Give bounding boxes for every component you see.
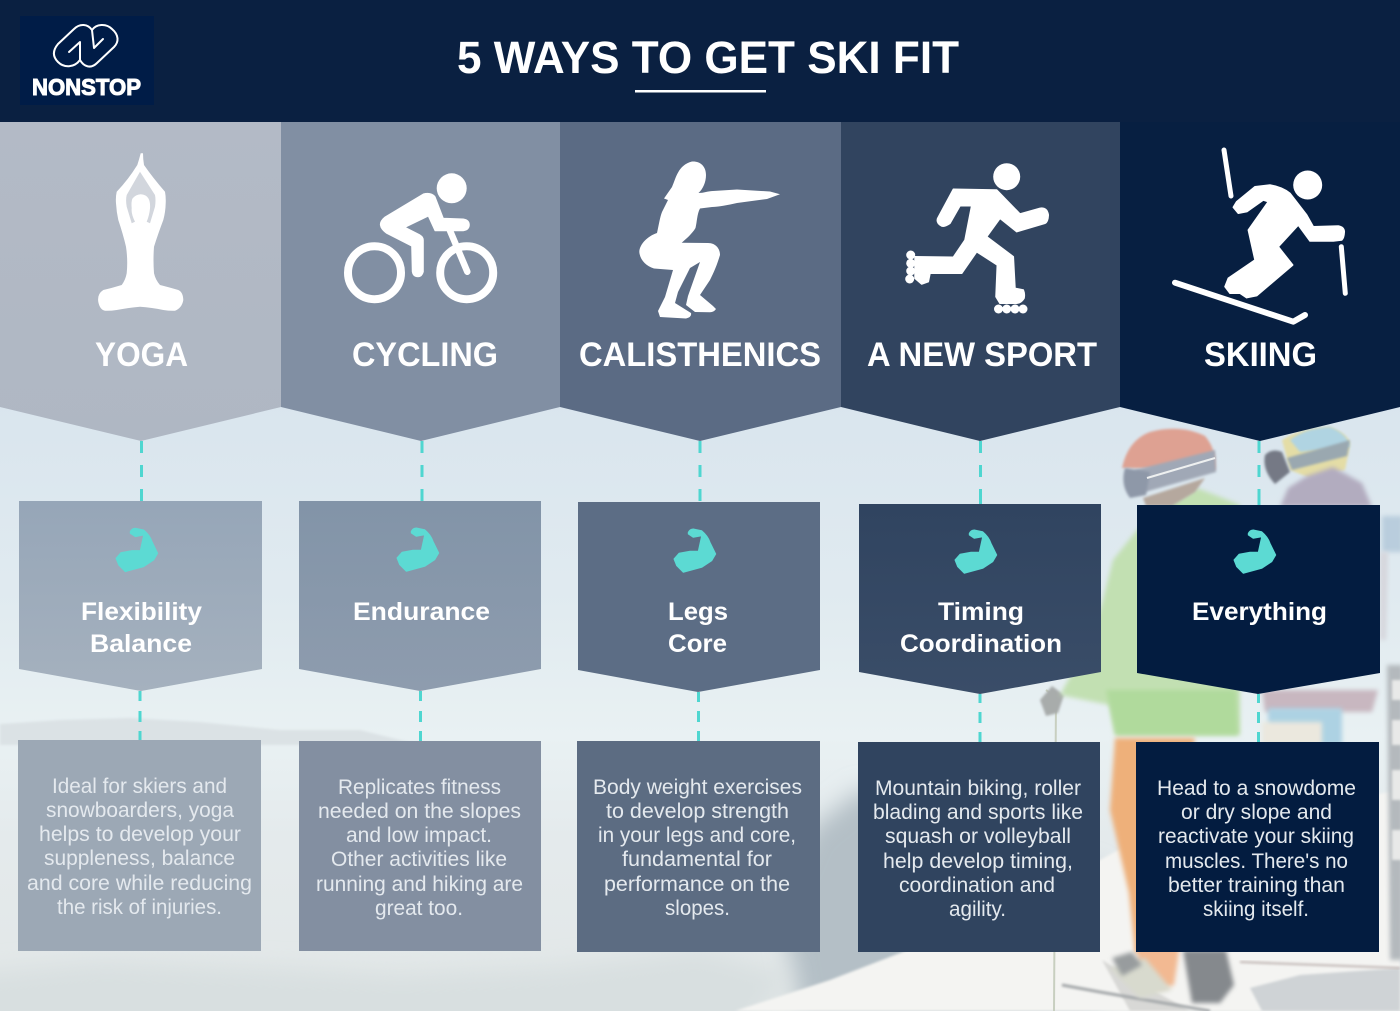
boots [1183,950,1234,1003]
logo: NONSTOP [20,16,154,105]
label: timing coordination: Coordination [900,630,1062,658]
description text: skiing itself. [1203,898,1309,921]
description text: Replicates fitness [338,776,501,799]
icon: flexed arm [116,528,158,572]
text panel: skiing description [1136,742,1379,952]
description text: fundamental for [622,848,772,871]
description text: needed on the slopes [318,800,521,823]
icon: skier [1175,150,1345,322]
jacket and trousers [1060,488,1240,735]
description text: the risk of injuries. [57,896,222,919]
description text: suppleness, balance [44,847,235,870]
description text [1157,777,1356,921]
description text [27,775,252,919]
skiing chevron [1120,122,1400,441]
description text: help develop timing, [883,850,1073,873]
description text: Mountain biking, roller [875,777,1081,800]
description text: and core while reducing [27,872,252,895]
text panel: cycling description [299,741,541,951]
description text: muscles. There's no [1165,850,1348,873]
panel: cycling column [281,122,560,441]
icon: flexed arm [1234,530,1276,573]
description text: great too. [375,897,463,920]
background: snowy mountain photo [0,400,1400,1011]
label: flexibility balance [81,598,202,658]
panel: legs and core [578,502,820,692]
description text: or dry slope and [1181,801,1332,824]
description text [316,776,523,920]
panel: new sport column [841,122,1120,441]
panel: timing and coordination [859,504,1101,694]
description text: squash or volleyball [885,825,1071,848]
yoga chevron [0,122,281,441]
description text: agility. [949,898,1006,921]
icon: flexed arm [955,530,997,573]
label: flexibility balance: Flexibility [81,598,202,626]
shield shape [19,501,262,691]
shield shape [578,502,820,692]
description text: Other activities like [331,848,507,871]
panel: everything [1137,505,1380,694]
description text: better training than [1168,874,1345,897]
heading: a new sport: A NEW SPORT [867,336,1097,374]
skier 1 helmet [1122,429,1215,470]
label: timing coordination [900,598,1062,658]
description text: running and hiking are [316,873,523,896]
shield shape [299,501,541,691]
label: legs core: Core [668,630,727,658]
description text [593,776,802,920]
description text: coordination and [899,874,1055,897]
description text: in your legs and core, [598,824,796,847]
panel: endurance [299,501,541,691]
calisthenics chevron [560,122,841,441]
description text: helps to develop your [39,823,241,846]
icon: yoga [98,153,183,311]
logo: NONSTOP: NONSTOP [32,74,141,100]
description text: slopes. [665,897,730,920]
icon: inline skater [905,163,1048,314]
panel: skiing column [1120,122,1400,441]
description text: performance on the [604,873,790,896]
panel: yoga column [0,122,281,441]
label: everything: Everything [1192,598,1327,626]
heading: calisthenics: CALISTHENICS [579,336,821,374]
text panel: yoga description [18,740,261,951]
icon: flexed arm [397,528,439,571]
connector: upper dashed lines [140,441,1260,505]
description text: Ideal for skiers and [52,775,227,798]
header band [0,0,1400,122]
description text: snowboarders, yoga [46,799,234,822]
description text: reactivate your skiing [1158,825,1354,848]
label: flexibility balance: Balance [90,630,192,658]
plaid trousers [1387,665,1400,960]
panel: flexibility and balance [19,501,262,691]
description text: Body weight exercises [593,776,802,799]
label: legs core: Legs [668,598,728,626]
heading: cycling: CYCLING [352,336,498,374]
connector: lower dashed lines [138,691,1260,742]
heading: skiing: SKIING [1204,336,1317,374]
heading: yoga: YOGA [95,336,188,374]
label: legs core [668,598,728,658]
label: endurance: Endurance [353,598,490,626]
description text: and low impact. [346,824,492,847]
description text: Head to a snowdome [1157,777,1356,800]
icon: cyclist [348,173,493,299]
shield shape [859,504,1101,694]
text panel: calisthenics description [577,741,820,952]
new sport chevron [841,122,1120,441]
shield shape [1137,505,1380,694]
description text [873,777,1083,921]
label: timing coordination: Timing [938,598,1024,626]
text panel: new sport description [858,742,1100,952]
panel: calisthenics column [560,122,841,441]
description text: to develop strength [606,800,789,823]
skier 2 helmet and jacket [1282,427,1350,478]
description text: blading and sports like [873,801,1083,824]
cycling chevron [281,122,560,441]
icon: flexed arm [674,529,716,572]
title: 5 WAYS TO GET SKI FIT [457,32,959,83]
icon: squat [639,161,780,318]
